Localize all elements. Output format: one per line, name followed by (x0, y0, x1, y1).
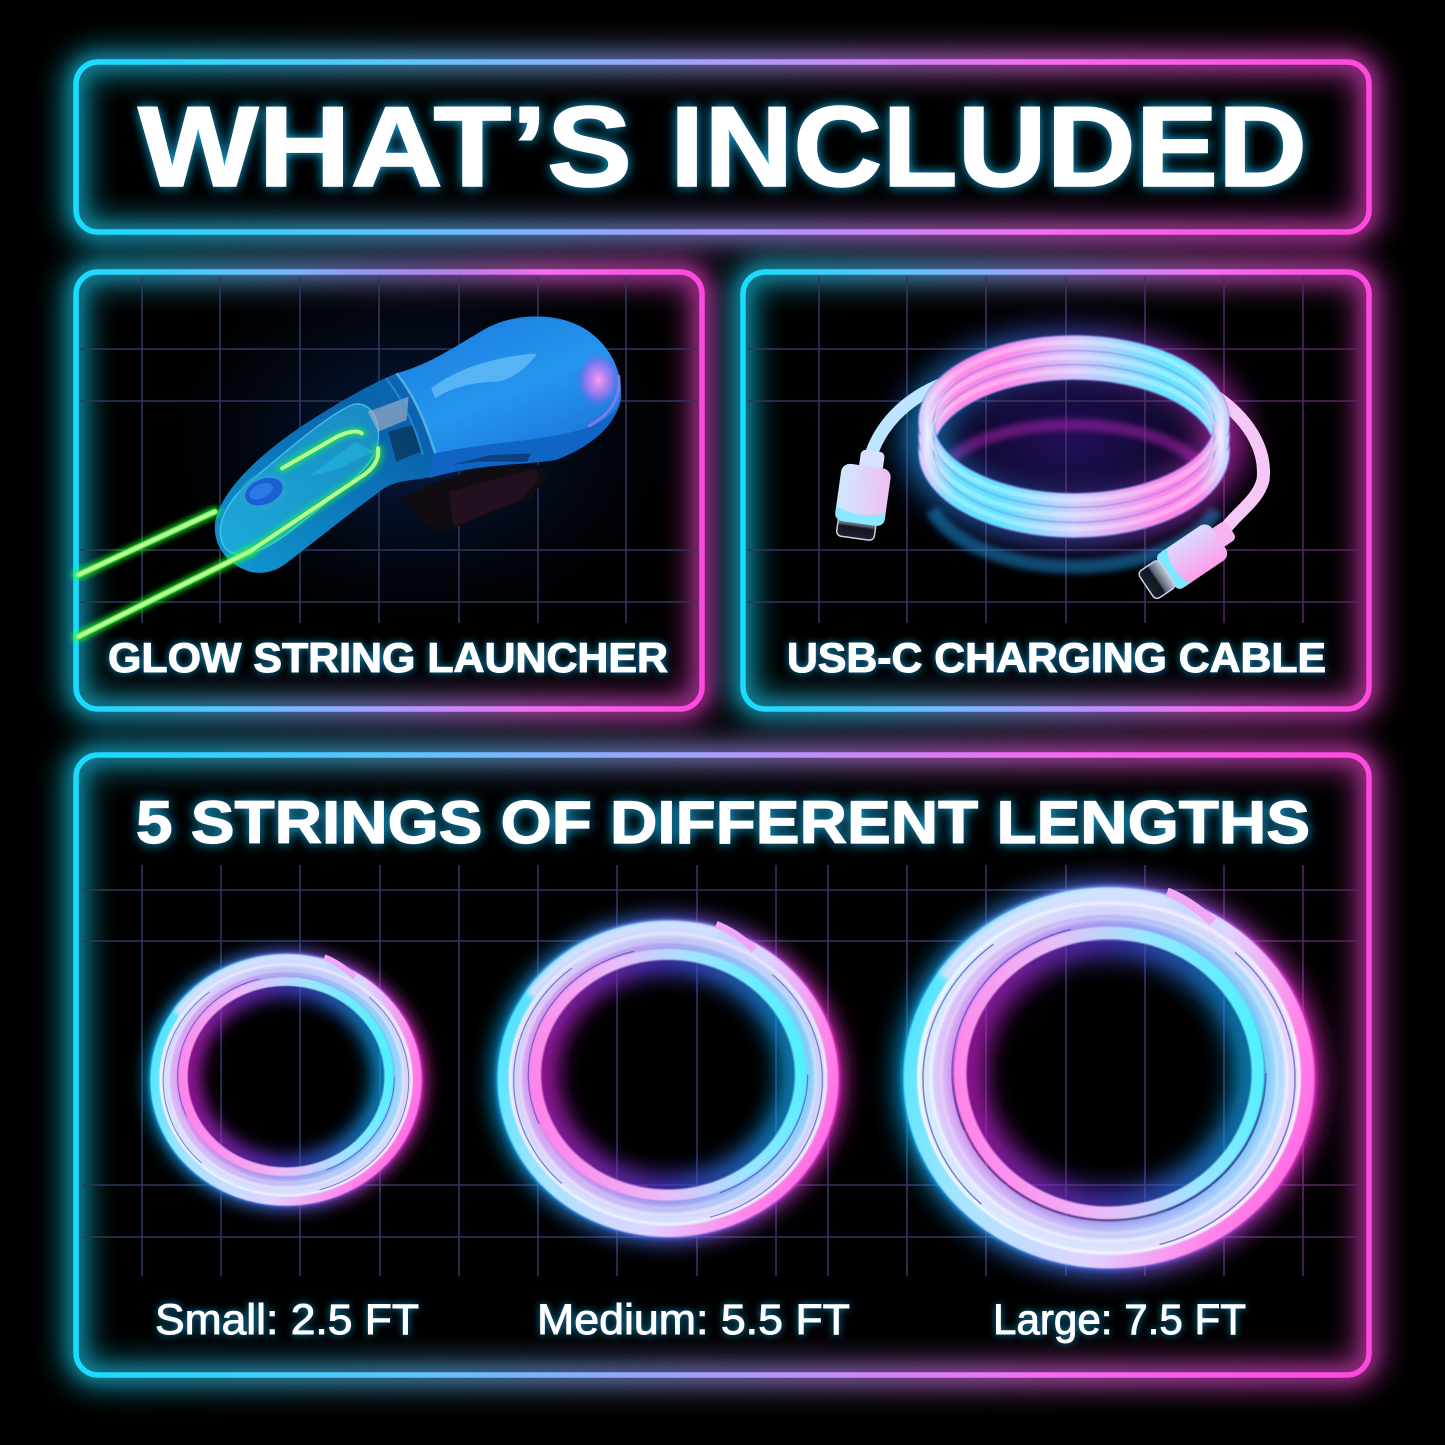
title: WHAT’S (138, 84, 632, 211)
coil highlights (926, 342, 1222, 529)
launcher device (78, 316, 621, 637)
title: INCLUDED (670, 84, 1307, 211)
panel: header (76, 62, 1369, 232)
panel: strings (76, 755, 1369, 1375)
strap (400, 465, 547, 533)
medium string coil (503, 925, 833, 1232)
head highlight (431, 353, 537, 398)
panel: glow string launcher (76, 250, 702, 709)
title (138, 84, 1307, 211)
green strings (78, 431, 378, 637)
cable label: USB-C CHARGING CABLE (787, 634, 1326, 681)
usb plug right (1135, 513, 1243, 604)
launcher label: GLOW STRING LAUNCHER (108, 634, 668, 681)
strings heading: 5 STRINGS OF DIFFERENT LENGTHS (136, 789, 1310, 856)
medium label: Medium: 5.5 FT (537, 1296, 850, 1344)
coil glow (924, 352, 1224, 520)
usb plug left (832, 447, 894, 542)
panel: usb-c charging cable (743, 272, 1369, 709)
clear capsule (220, 404, 379, 555)
launcher head (396, 316, 621, 453)
launcher body (215, 316, 621, 573)
coil strands (926, 343, 1222, 530)
cable reflection (932, 425, 1216, 567)
cable tails (870, 385, 1263, 528)
small label: Small: 2.5 FT (155, 1296, 419, 1344)
large string coil (910, 892, 1308, 1262)
usb cable (832, 342, 1263, 604)
large label: Large: 7.5 FT (993, 1296, 1246, 1344)
small string coil (155, 957, 417, 1201)
launch button (231, 466, 297, 518)
lower shell (429, 412, 617, 478)
